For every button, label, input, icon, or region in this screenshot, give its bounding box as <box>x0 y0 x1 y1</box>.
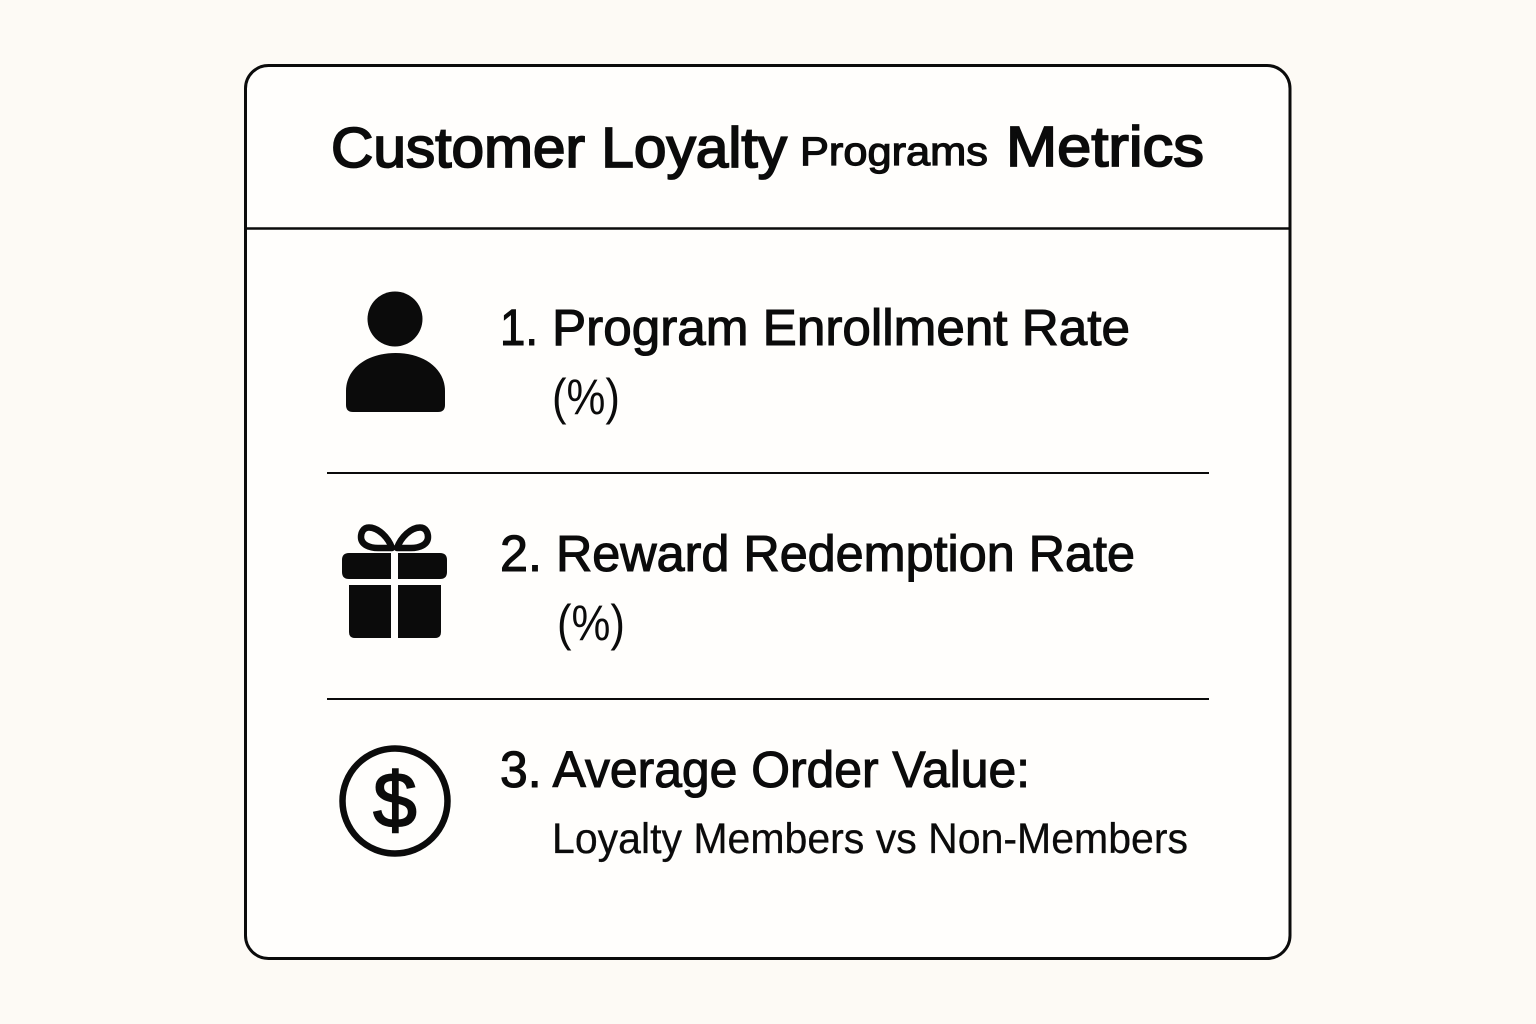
metric 3 text <box>500 741 1188 863</box>
title: Metrics <box>1006 115 1204 179</box>
icon: dollar coin: $ <box>373 756 417 844</box>
metric 1 text: 1. <box>500 299 538 356</box>
metric 1 text <box>500 299 1130 425</box>
panel: metrics card <box>246 66 1290 958</box>
metric 1 text: (%) <box>552 369 620 425</box>
icon: gift <box>342 528 447 638</box>
metric 1 text: Program Enrollment Rate <box>552 299 1130 356</box>
metric 2 text: 2. Reward Redemption Rate <box>500 525 1135 582</box>
title: Programs <box>800 130 988 174</box>
title: Customer Loyalty <box>331 116 788 180</box>
icon: dollar coin <box>342 748 448 854</box>
metric 3 text: Loyalty Members vs Non-Members <box>552 815 1188 863</box>
metric 2 text: (%) <box>557 595 625 651</box>
icon: person <box>346 292 445 412</box>
title <box>331 115 1204 180</box>
metric 2 text <box>500 525 1135 651</box>
metric 3 text: 3. Average Order Value: <box>500 741 1030 798</box>
